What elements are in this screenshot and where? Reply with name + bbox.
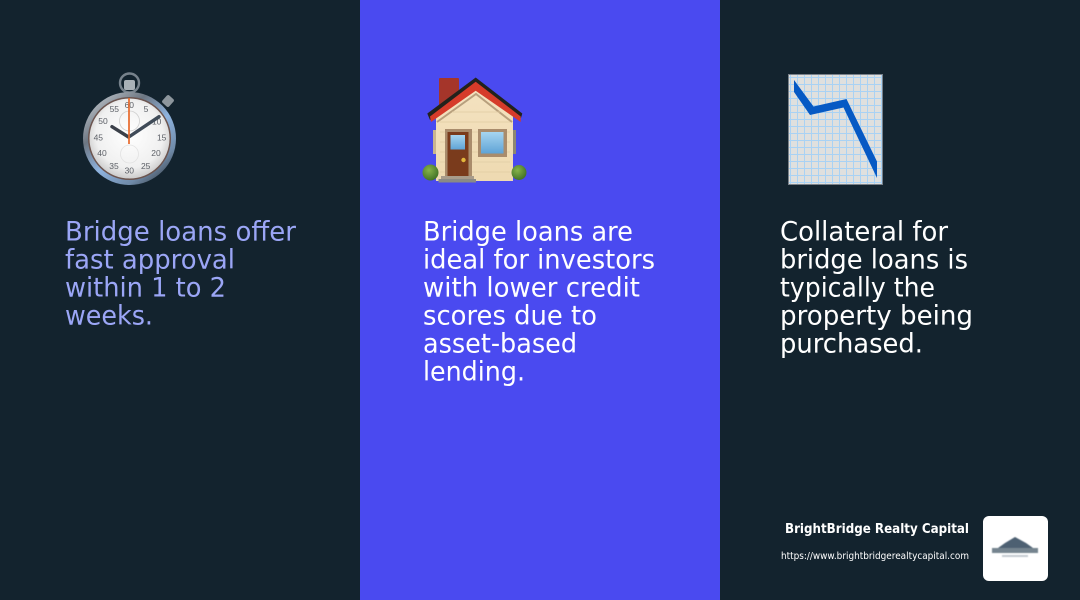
icon: stopwatch: 30 — [125, 166, 134, 176]
icon: stopwatch: 55 — [110, 104, 119, 114]
text: collateral: purchased. — [780, 329, 923, 360]
text: lower credit scores — [423, 217, 655, 388]
panel: left background — [0, 0, 360, 600]
icon: stopwatch: 25 — [141, 161, 151, 171]
text: collateral: bridge loans is — [780, 245, 968, 276]
icon: stopwatch: 45 — [94, 133, 103, 143]
text: lower credit scores: lending. — [423, 357, 525, 388]
text: website url: https://www.brightbridgerealtycapital.com — [781, 551, 969, 562]
text: fast approval: fast approval — [65, 245, 235, 276]
text: fast approval: Bridge loans offer — [65, 217, 297, 248]
icon: stopwatch: 60 — [125, 100, 134, 110]
text: collateral: typically the — [780, 273, 935, 304]
icon: stopwatch: 50 — [98, 116, 108, 126]
text: lower credit scores: with lower credit — [423, 273, 640, 304]
text: fast approval: within 1 to 2 — [65, 273, 226, 304]
panel: right background — [720, 0, 1080, 600]
text: collateral: Collateral for — [780, 217, 949, 248]
text: collateral — [780, 217, 973, 360]
icon: stopwatch: 20 — [151, 148, 161, 158]
icon: stopwatch: 15 — [157, 133, 167, 143]
text: fast approval: weeks. — [65, 301, 153, 332]
text: lower credit scores: scores due to — [423, 301, 597, 332]
icon: stopwatch: 40 — [97, 148, 107, 158]
icon: stopwatch: 10 — [152, 117, 162, 127]
text: lower credit scores: asset-based — [423, 329, 577, 360]
icon: stopwatch: 35 — [109, 161, 119, 171]
text: fast approval — [65, 217, 297, 332]
logo — [983, 516, 1048, 581]
panel: center background — [360, 0, 720, 600]
text: lower credit scores: Bridge loans are — [423, 217, 633, 248]
icon: stopwatch: 5 — [144, 104, 149, 114]
text: company name: BrightBridge Realty Capital — [785, 521, 969, 537]
text: lower credit scores: ideal for investors — [423, 245, 655, 276]
icon: stopwatch — [83, 74, 176, 185]
icon: house — [422, 78, 526, 182]
icon: chart with downward trend — [788, 74, 882, 184]
text: collateral: property being — [780, 301, 973, 332]
